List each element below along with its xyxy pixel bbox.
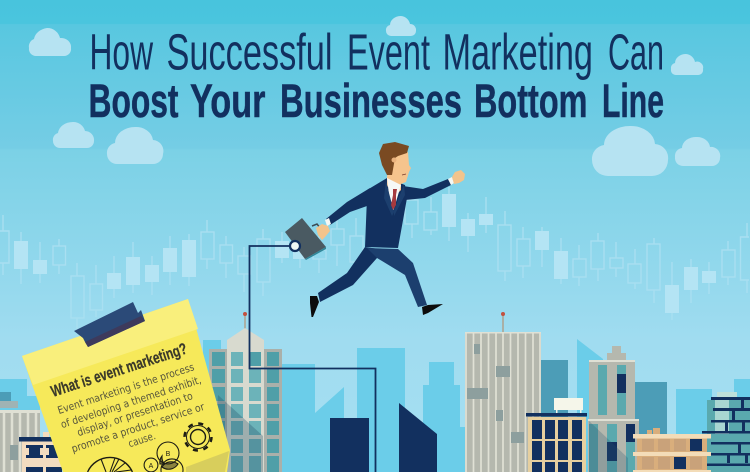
- note paper: [22, 299, 230, 472]
- title: Businesses: [280, 74, 462, 127]
- title: Bottom: [474, 74, 588, 127]
- peach building: [633, 428, 711, 472]
- tape: [74, 302, 145, 347]
- candlestick chart background: [0, 187, 749, 330]
- briefcase: [285, 218, 326, 260]
- page curl: [186, 451, 229, 472]
- right hand: [452, 170, 465, 184]
- left grey building: [0, 401, 40, 472]
- clouds: [29, 16, 720, 176]
- icon: venn diagram: B: [166, 451, 171, 458]
- back shoe: [310, 296, 319, 317]
- left cuff: [325, 218, 331, 226]
- left arm: [326, 188, 370, 225]
- grey striped skyscraper: [465, 312, 541, 472]
- hair: [379, 142, 409, 175]
- mouth: [402, 174, 406, 175]
- title: Successful: [166, 24, 332, 80]
- note body text: [56, 361, 207, 455]
- tan building with billboard: [526, 398, 587, 472]
- front shoe: [422, 304, 443, 315]
- teal brick building: [702, 392, 750, 472]
- torso: [365, 178, 407, 248]
- note top band: [22, 299, 198, 385]
- title: Event: [347, 24, 430, 80]
- icon: venn diagram: [144, 442, 183, 472]
- front leg: [367, 248, 427, 307]
- note body text: display, or presentation to: [76, 390, 194, 439]
- title: [88, 24, 664, 127]
- note body text: cause.: [127, 430, 157, 450]
- left glass tower: [209, 312, 282, 472]
- ear: [392, 158, 396, 162]
- businessman running: [285, 142, 465, 317]
- lapels: [384, 180, 405, 216]
- note body text: promote a product, service or: [70, 401, 207, 455]
- note body text: of developing a themed exhibit,: [59, 374, 203, 431]
- shirt: [387, 178, 401, 212]
- left tan building: [19, 432, 62, 472]
- wire path: [250, 246, 376, 472]
- title: Line: [602, 74, 664, 127]
- grey office tower: [588, 346, 639, 472]
- sticky note: [22, 299, 230, 472]
- title: Can: [608, 24, 664, 80]
- wire node: [290, 241, 300, 251]
- note body text: Event marketing is the process: [56, 361, 196, 417]
- right cuff: [448, 177, 454, 185]
- left hand: [316, 224, 330, 240]
- icon: pie chart: [88, 457, 132, 472]
- neck and face: [387, 152, 411, 194]
- back leg: [318, 247, 385, 302]
- icon: gear: [184, 424, 212, 450]
- navy foreground buildings: [330, 403, 437, 472]
- title: Marketing: [442, 24, 593, 80]
- right arm: [403, 179, 451, 200]
- title: Boost: [88, 74, 179, 127]
- note heading: What is event marketing?: [49, 341, 189, 401]
- icon: venn diagram: A: [149, 463, 154, 470]
- title: Your: [190, 74, 266, 127]
- background skyline: [0, 339, 750, 472]
- tie: [391, 189, 397, 210]
- title: How: [90, 24, 153, 80]
